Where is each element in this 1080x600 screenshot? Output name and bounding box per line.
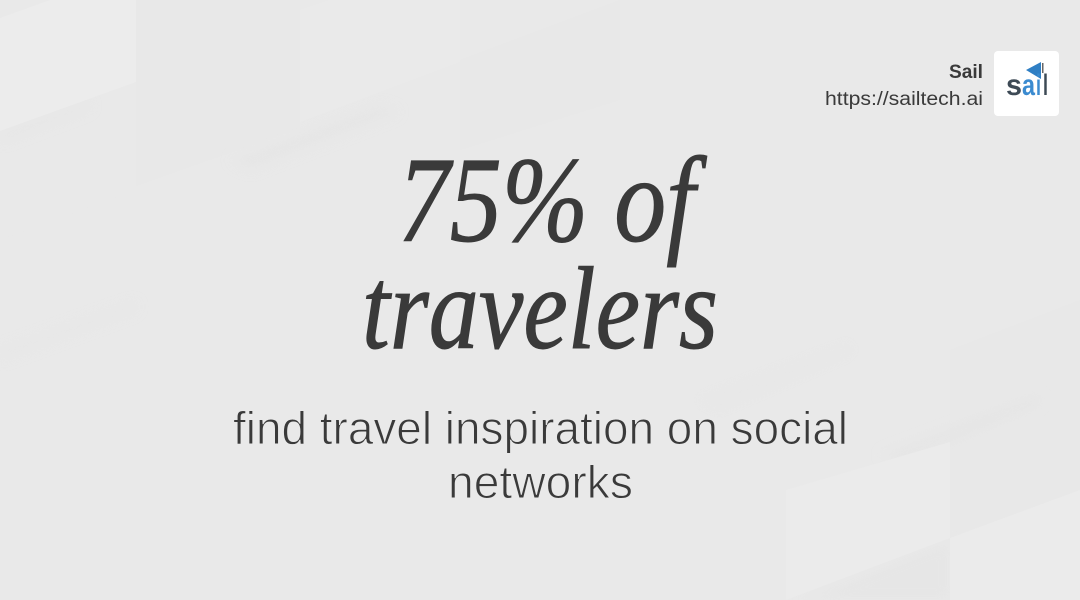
subtitle (233, 402, 848, 508)
subtitle line 1: find travel inspiration on social (233, 402, 848, 454)
subtitle line 2: networks (448, 456, 633, 508)
icon: sail logo: i (1036, 69, 1041, 102)
brand url: https://sailtech.ai (825, 89, 983, 110)
icon: sail logo: l (1043, 69, 1048, 102)
title line 2: travelers (362, 243, 718, 374)
icon: sail logo: a (1022, 69, 1035, 102)
title line 1: 75% of (398, 133, 707, 268)
title (362, 133, 718, 374)
icon: sail logo: s (1006, 69, 1022, 102)
brand name: Sail (949, 62, 983, 83)
brand block: Sail (825, 51, 1059, 116)
icon: sail logo (994, 51, 1059, 116)
